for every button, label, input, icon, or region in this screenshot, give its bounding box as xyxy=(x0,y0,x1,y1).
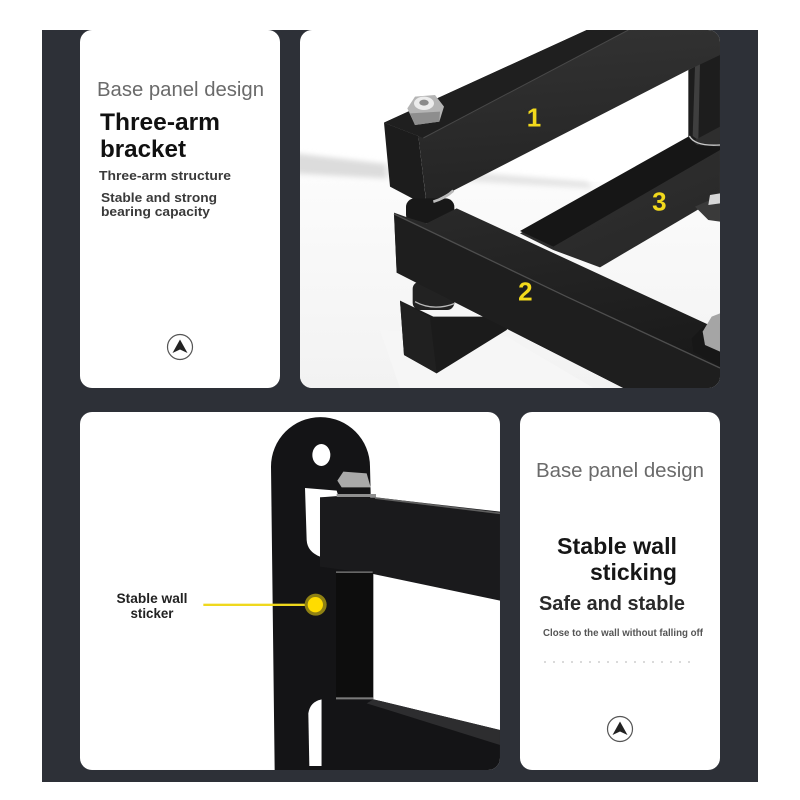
callout label: sticker xyxy=(130,606,174,621)
card heading: bracket xyxy=(100,136,186,163)
card heading: sticking xyxy=(590,559,677,585)
card description: bearing capacity xyxy=(101,204,211,219)
panel: wall plate photo xyxy=(80,412,500,770)
panel: three-arm bracket text card xyxy=(80,30,280,388)
number labels xyxy=(518,103,667,306)
card subheading: Three-arm structure xyxy=(99,168,231,183)
panel: three-arm bracket photo xyxy=(290,30,720,390)
card eyebrow: Base panel design xyxy=(97,79,264,101)
card heading: Stable wall xyxy=(557,533,677,559)
number labels: 3 xyxy=(652,187,667,217)
callout label xyxy=(116,591,188,621)
card description xyxy=(101,190,217,219)
callout: stable wall sticker xyxy=(203,594,327,616)
card heading xyxy=(100,109,220,163)
card description: Close to the wall without falling off xyxy=(543,628,704,639)
arm 3 xyxy=(520,53,720,267)
upper arm xyxy=(320,497,500,601)
card eyebrow: Base panel design xyxy=(536,460,704,482)
arm 2 xyxy=(394,208,720,388)
number labels: 1 xyxy=(527,103,541,133)
card heading xyxy=(557,533,677,585)
icon: navigation arrow xyxy=(608,716,632,742)
wall plate xyxy=(271,417,376,770)
panel: stable wall sticking text card xyxy=(520,412,720,770)
faded text remnant xyxy=(544,661,696,663)
hex nut xyxy=(407,95,444,125)
pivot upper xyxy=(406,191,454,223)
arm 1 xyxy=(384,30,720,206)
card subheading: Safe and stable xyxy=(539,593,685,615)
pivot lower and bottom block xyxy=(400,282,513,373)
icon: navigation arrow xyxy=(168,334,192,360)
card description: Stable and strong xyxy=(101,190,217,205)
number labels: 2 xyxy=(518,276,533,306)
card heading: Three-arm xyxy=(100,109,220,136)
callout label: Stable wall xyxy=(116,591,188,606)
pivot column xyxy=(336,571,373,700)
lower arm xyxy=(322,699,500,770)
